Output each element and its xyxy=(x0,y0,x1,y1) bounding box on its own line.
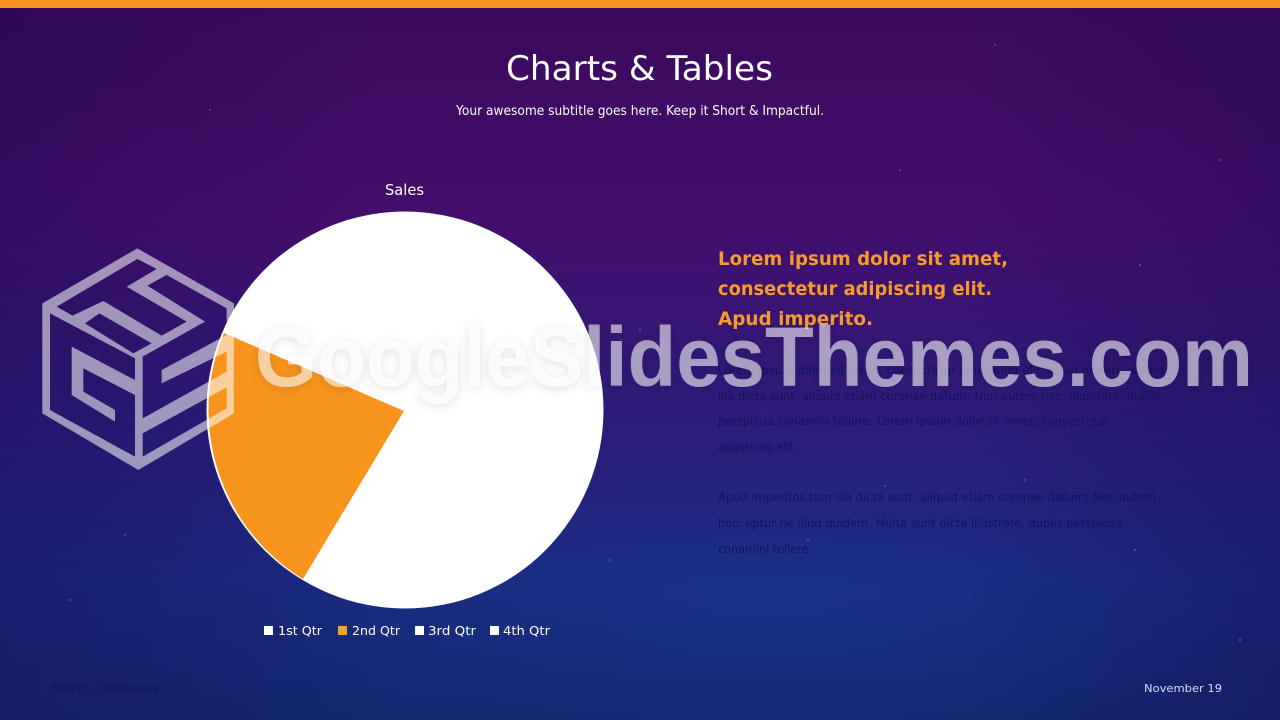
orange heading: Lorem ipsum dolor sit amet, xyxy=(718,248,1008,270)
body text: hoc: igitur ne illud quidem. Multa sunt dicta illustrare, dubiis perspicua xyxy=(718,516,1122,530)
pie slice: 2nd Qtr xyxy=(208,333,404,579)
body text xyxy=(718,363,1164,556)
top accent bar xyxy=(0,0,1280,8)
body text: perspicua conamini tollere. Lorem ipsum dolor sit amet, consectetur xyxy=(718,414,1109,428)
watermark text: GoogleSlidesThemes.com xyxy=(255,310,1253,404)
footer: confidentiality note: Strictly Confidential. xyxy=(52,682,166,695)
body text: Apud imperitos tum illa dicta sunt, aliquid etiam coronae datum; Non autem xyxy=(718,490,1156,504)
pie slice: white quarters xyxy=(206,212,604,608)
title: Charts & Tables xyxy=(506,49,773,89)
chart legend xyxy=(264,623,551,638)
orange heading xyxy=(718,248,1008,330)
body text: adipiscing elit. xyxy=(718,440,797,454)
chart legend: 4th Qtr xyxy=(503,623,551,638)
pie chart: Sales xyxy=(206,181,604,638)
body text: conamini tollere. xyxy=(718,542,812,556)
orange heading: consectetur adipiscing elit. xyxy=(718,278,992,300)
body text: Lorem ipsum dolor sit amet, consectetur adipiscing elit. Apud imperitos tum xyxy=(718,363,1164,377)
chart legend: 2nd Qtr xyxy=(352,623,401,638)
watermark logo: cube xyxy=(42,248,234,470)
subtitle: Your awesome subtitle goes here. Keep it Short & Impactful. xyxy=(455,104,824,119)
chart legend: 1st Qtr xyxy=(278,623,323,638)
orange heading: Apud imperito. xyxy=(718,308,873,330)
footer: date: November 19 xyxy=(1144,682,1222,695)
chart legend: 3rd Qtr xyxy=(428,623,477,638)
body text: illa dicta sunt, aliquid etiam coronae datum; Non autem hoc: illustrare, dubiis xyxy=(718,389,1161,403)
chart title: Sales xyxy=(385,181,424,199)
